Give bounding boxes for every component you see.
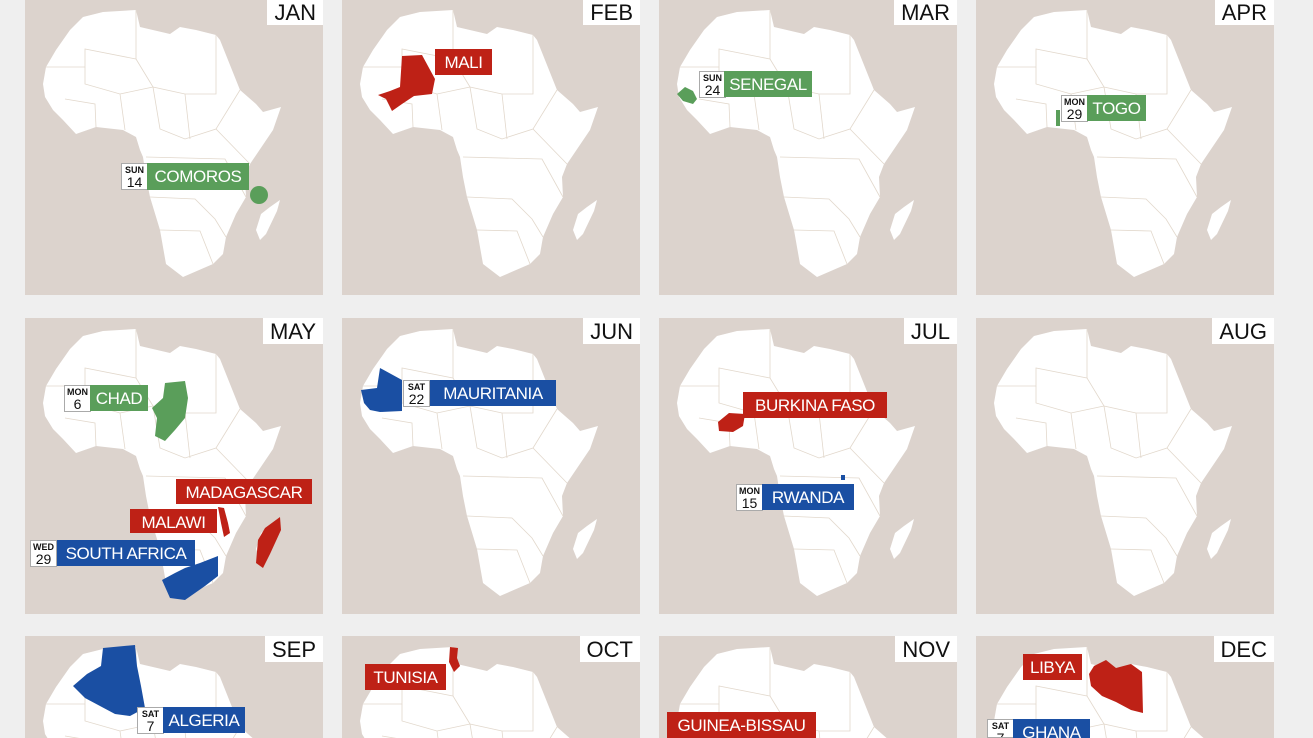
country label: Guinea-Bissau: GUINEA-BISSAU (678, 716, 806, 735)
date badge (987, 719, 1014, 738)
country label: Malawi: MALAWI (141, 513, 206, 532)
month label JUL: JUL (911, 319, 950, 344)
shape: Madagascar (256, 517, 281, 568)
shape: Chad (152, 381, 188, 441)
month label DEC: DEC (1221, 637, 1267, 662)
shape: Libya (1089, 660, 1143, 713)
date badge: 24 (705, 82, 720, 98)
icon: Comoros dot (250, 186, 268, 204)
country label: Burkina Faso: BURKINA FASO (755, 396, 875, 415)
date badge (403, 380, 430, 407)
shape: Malawi (218, 507, 230, 537)
date badge: 29 (36, 551, 51, 567)
shape: Algeria (73, 645, 145, 716)
shape: Burkina Faso (718, 413, 745, 432)
date badge: WED (33, 542, 54, 552)
country label: Tunisia: TUNISIA (373, 668, 438, 687)
panel: OCT (342, 636, 640, 738)
month label MAR: MAR (901, 0, 950, 25)
country label: Senegal (724, 71, 812, 97)
country label: South Africa: SOUTH AFRICA (66, 544, 186, 563)
month label FEB: FEB (590, 0, 633, 25)
country label: Algeria: ALGERIA (169, 711, 239, 730)
date badge: 6 (74, 396, 81, 412)
shape: Rwanda (841, 475, 845, 480)
date badge: SUN (125, 165, 144, 175)
country label: Tunisia (365, 664, 446, 690)
date badge: 22 (409, 391, 424, 407)
country label: Chad (90, 385, 148, 411)
panel: FEB (342, 0, 640, 295)
month label JUN: JUN (590, 319, 633, 344)
country label: Madagascar (176, 479, 312, 504)
date badge (30, 540, 57, 567)
date badge: SUN (703, 73, 722, 83)
shape: Mauritania (361, 368, 402, 412)
date badge: SAT (992, 721, 1009, 731)
shape: Mali (378, 55, 435, 111)
country label: Mauritania (430, 380, 556, 406)
shape: Togo (1056, 110, 1060, 126)
month label APR: APR (1222, 0, 1267, 25)
panel: NOV (659, 636, 957, 738)
panel: JAN (25, 0, 323, 295)
date badge (137, 707, 164, 734)
country label: Burkina Faso (743, 392, 887, 418)
country label: Ghana (1013, 719, 1090, 738)
date badge (699, 71, 726, 98)
country label: Algeria (163, 707, 245, 733)
panel: JUL (659, 318, 957, 614)
panel: SEP (25, 636, 323, 738)
country label: Chad: CHAD (96, 389, 142, 408)
country label: Rwanda: RWANDA (772, 488, 844, 507)
month label SEP: SEP (272, 637, 316, 662)
country label: Guinea-Bissau (667, 712, 816, 738)
country label: Mali: MALI (444, 53, 483, 72)
panel: MAY (25, 318, 323, 614)
date badge (121, 163, 148, 190)
shape: South Africa (162, 556, 218, 600)
panel: AUG (976, 318, 1274, 614)
panel: JUN (342, 318, 640, 614)
shape: Senegal (677, 87, 697, 104)
panel: DEC (976, 636, 1274, 738)
date badge: MON (739, 486, 760, 496)
country label: Togo: TOGO (1092, 99, 1141, 118)
month label AUG: AUG (1219, 319, 1267, 344)
date badge: MON (1064, 97, 1085, 107)
date badge: 14 (127, 174, 142, 190)
date badge (1061, 95, 1088, 122)
panel: MAR (659, 0, 957, 295)
country label: Libya (1023, 654, 1082, 680)
date badge: 7 (147, 718, 154, 734)
date badge: MON (67, 387, 88, 397)
country label: Mali (435, 49, 492, 75)
date badge (736, 484, 763, 511)
panel: APR (976, 0, 1274, 295)
date badge: 15 (742, 495, 757, 511)
country label: Comoros: COMOROS (155, 167, 241, 186)
country label: Rwanda (762, 484, 854, 510)
date badge: SAT (408, 382, 425, 392)
date badge: SAT (142, 709, 159, 719)
month label OCT: OCT (587, 637, 633, 662)
date badge (64, 385, 91, 412)
country label: Libya: LIBYA (1030, 658, 1075, 677)
country label: Comoros (147, 163, 249, 190)
country label: Malawi (130, 509, 217, 533)
date badge: 29 (1067, 106, 1082, 122)
month label JAN: JAN (274, 0, 316, 25)
month label MAY: MAY (270, 319, 316, 344)
country label: Mauritania: MAURITANIA (443, 384, 543, 403)
country label: Senegal: SENEGAL (729, 75, 807, 94)
country label: Madagascar: MADAGASCAR (186, 483, 302, 502)
shape: Tunisia (449, 647, 460, 672)
country label: South Africa (57, 540, 195, 566)
country label: Togo (1087, 95, 1146, 121)
month label NOV: NOV (902, 637, 950, 662)
